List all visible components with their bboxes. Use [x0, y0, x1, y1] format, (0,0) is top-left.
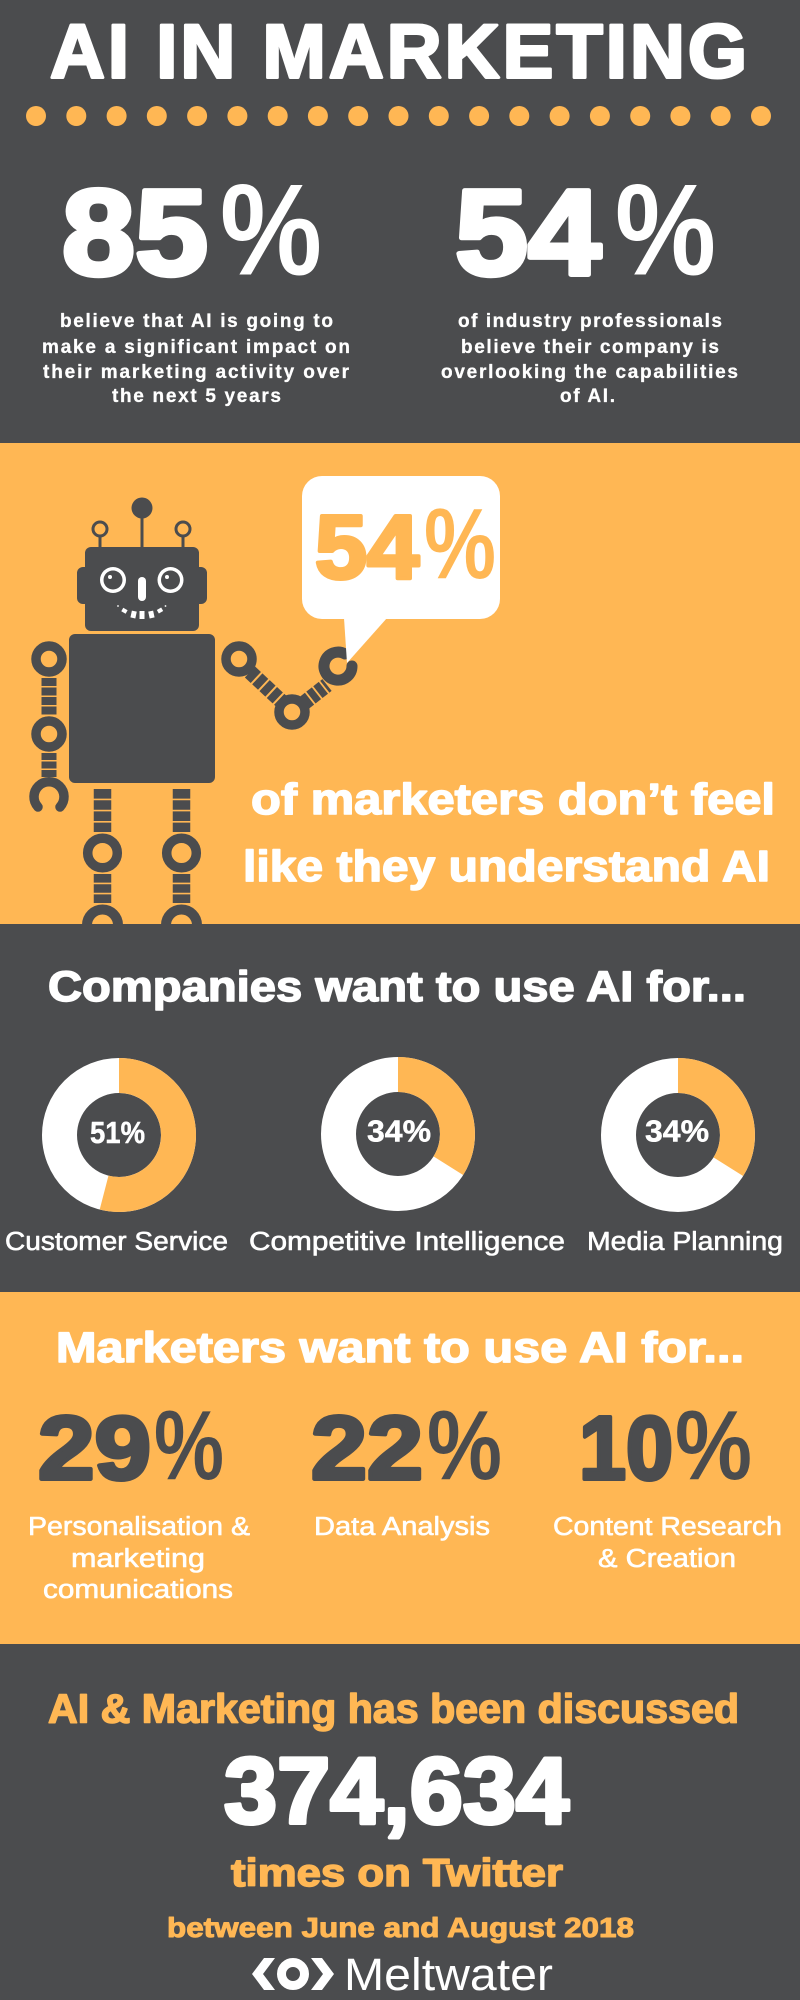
label: media planning: Media Planning — [587, 1228, 783, 1256]
robot right leg — [166, 789, 197, 940]
text block: times on twitter: times on Twitter — [231, 1852, 563, 1895]
text block: marketers understanding: of marketers don’t feel — [251, 775, 775, 824]
label: personalisation: marketing — [71, 1545, 205, 1573]
label: content research: Content Research — [553, 1513, 782, 1541]
donut chart: media planning — [618, 1076, 738, 1194]
panel: marketers background — [0, 1292, 800, 1644]
stat: 85 percent: % — [220, 156, 322, 302]
logo: meltwater — [252, 1949, 553, 2000]
text block: 85 percent description: their marketing activity over — [43, 362, 350, 383]
stat: 54 percent: % — [615, 156, 716, 302]
text block: date range: between June and August 2018 — [167, 1912, 634, 1943]
robot body — [69, 634, 215, 783]
label: personalisation — [28, 1513, 250, 1604]
donut chart: competitive intelligence — [338, 1074, 458, 1194]
donut chart: competitive intelligence: 34% — [367, 1114, 431, 1148]
text block: 85 percent description — [42, 311, 350, 407]
title: AI IN MARKETING — [50, 10, 747, 94]
callout value: 54 — [315, 498, 419, 598]
text block: 54 percent description: believe their company is — [461, 337, 719, 358]
stat: twitter mentions: 374,634 — [224, 1738, 569, 1843]
label: data analysis: Data Analysis — [314, 1513, 490, 1541]
stat: 10 percent: 10 — [579, 1399, 673, 1499]
robot right arm — [226, 646, 352, 725]
robot antennae — [93, 498, 190, 548]
callout value: % — [424, 488, 496, 600]
logo mark — [252, 1958, 334, 1990]
stat: 22 percent: 22 — [311, 1399, 423, 1499]
logo wordmark: Meltwater — [344, 1949, 553, 2000]
label: competitive intelligence: Competitive Intelligence — [249, 1228, 565, 1256]
heading: companies: Companies want to use AI for... — [48, 963, 746, 1011]
donut chart: customer service: 51% — [90, 1115, 145, 1150]
panel: orange robot background — [0, 443, 800, 924]
callout: speech bubble — [302, 476, 500, 663]
text block: 85 percent description: believe that AI is going to — [60, 311, 333, 332]
label: content research — [553, 1513, 782, 1573]
label: customer service: Customer Service — [5, 1228, 228, 1256]
stat: 29 percent: % — [154, 1390, 224, 1500]
donut chart: media planning: 34% — [645, 1114, 709, 1148]
text block: 54 percent description: overlooking the capabilities — [441, 362, 738, 383]
text block: marketers understanding — [243, 775, 775, 891]
label: personalisation: comunications — [43, 1576, 233, 1604]
stat: 54 percent: 54 — [455, 164, 601, 300]
robot head — [77, 547, 207, 631]
text block: 54 percent description: of AI. — [560, 386, 615, 407]
text block: 54 percent description — [441, 311, 738, 407]
heading: marketers: Marketers want to use AI for... — [56, 1324, 744, 1372]
robot left leg — [87, 789, 118, 940]
dotted divider — [26, 106, 771, 126]
text block: 85 percent description: make a significant impact on — [42, 337, 350, 358]
text block: 54 percent description: of industry professionals — [458, 311, 722, 332]
stat: 85 percent: 85 — [62, 164, 208, 300]
label: personalisation: Personalisation & — [28, 1513, 250, 1541]
icon: robot — [34, 498, 352, 940]
panel: dark band covering robot feet — [0, 924, 800, 1292]
text block: marketers understanding: like they understand AI — [243, 842, 770, 891]
text block: 85 percent description: the next 5 years — [112, 386, 281, 407]
label: content research: & Creation — [598, 1545, 736, 1573]
heading: twitter discussion: AI & Marketing has been discussed — [48, 1686, 739, 1732]
robot left arm — [34, 646, 64, 807]
stat: 22 percent: % — [427, 1390, 502, 1500]
donut chart: customer service — [60, 1076, 179, 1194]
stat: 29 percent: 29 — [38, 1399, 151, 1499]
stat: 10 percent: % — [675, 1390, 752, 1500]
